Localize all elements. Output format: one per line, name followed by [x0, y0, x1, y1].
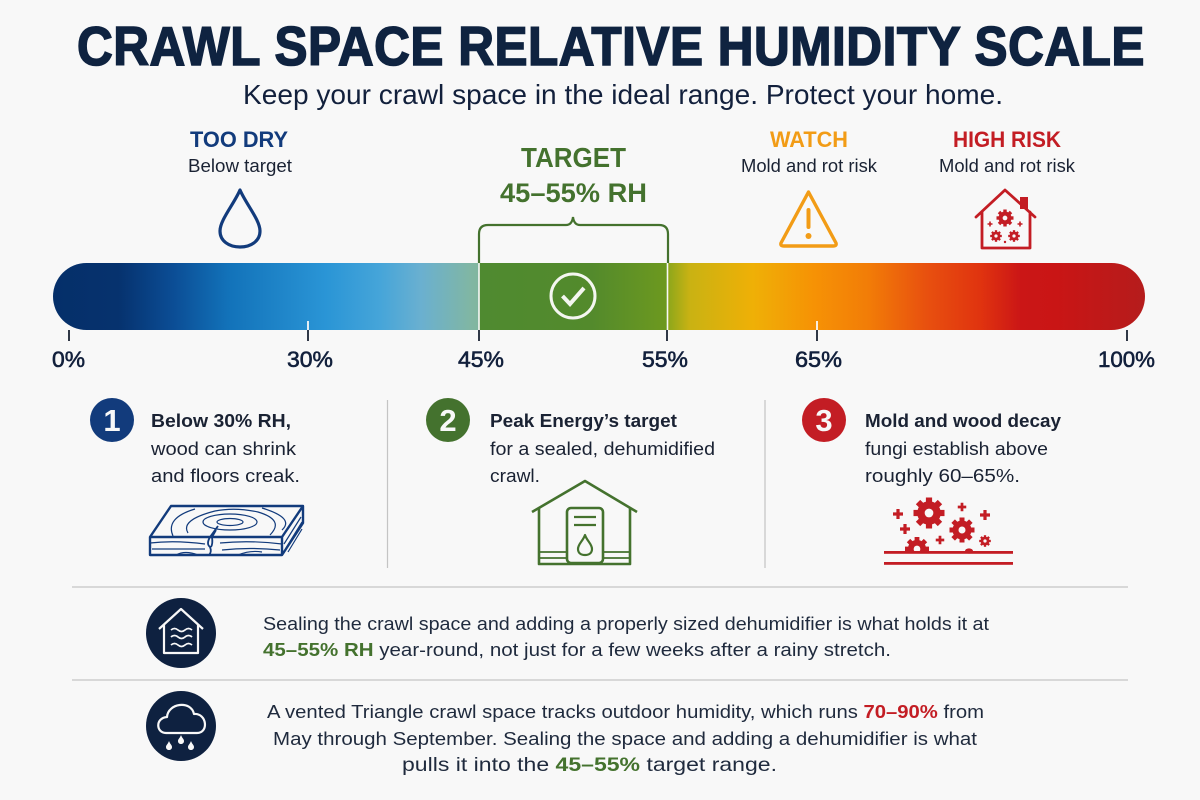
zone label: high risk: [939, 127, 1076, 176]
icon: house with humidity waves: [146, 598, 216, 668]
divider: [764, 400, 766, 568]
zone label: target: 45–55% RH: [500, 178, 647, 208]
note text 3: fungi establish above: [865, 438, 1048, 459]
panel: high risk note: [802, 398, 1062, 565]
note text 3: roughly 60–65%.: [865, 465, 1020, 486]
zone label: target: [500, 142, 647, 208]
note text 2: for a sealed, dehumidified: [490, 438, 715, 459]
number badge 2: [426, 398, 470, 442]
note text 1: wood can shrink: [150, 438, 297, 459]
zone label: watch: [741, 127, 878, 176]
target zone: [479, 263, 667, 330]
callout: vented crawl text: May through September. Sealing the space and adding a dehumidifier is what: [273, 728, 977, 749]
zone label: too dry: TOO DRY: [190, 127, 288, 152]
zone label: too dry: Below target: [188, 156, 292, 176]
icon: house with dehumidifier: [532, 481, 637, 564]
number badge 2: 2: [439, 403, 457, 438]
icon: cracked wood board: [150, 506, 303, 555]
humidity gradient bar: [53, 263, 1145, 330]
scale ticks: [69, 330, 1127, 341]
callout: sealing text: 45–55% RH year-round, not just for a few weeks after a rainy stretch.: [263, 639, 891, 660]
icon: mold spores on surface: [884, 498, 1013, 565]
panel: target note: [426, 398, 715, 564]
note text 1: Below 30% RH,: [151, 410, 291, 431]
note text 1: and floors creak.: [151, 465, 300, 486]
scale labels: 55%: [642, 347, 688, 372]
zone label: watch: WATCH: [770, 127, 848, 152]
panel: too dry note: [90, 398, 303, 555]
zone label: high risk: Mold and rot risk: [939, 156, 1076, 176]
zone label: too dry: [188, 127, 292, 176]
note text 3: [865, 410, 1062, 486]
callout: vented crawl text: [267, 701, 984, 776]
number badge 3: 3: [815, 403, 833, 438]
target bracket: [479, 217, 668, 263]
note text 2: [490, 410, 715, 486]
divider: [72, 679, 1128, 681]
scale labels: 65%: [795, 347, 842, 372]
title: CRAWL SPACE RELATIVE HUMIDITY SCALE: [77, 17, 1144, 78]
icon: rain cloud: [146, 691, 216, 761]
note text 1: [150, 410, 300, 486]
callout: sealing text: [263, 613, 989, 660]
number badge 1: [90, 398, 134, 442]
scale labels: 30%: [287, 347, 333, 372]
note text 3: Mold and wood decay: [865, 410, 1062, 431]
icon: moldy house: [976, 190, 1035, 248]
icon: check mark: [551, 274, 595, 318]
scale labels: 0%: [52, 347, 85, 372]
zone label: high risk: HIGH RISK: [953, 127, 1061, 152]
zone label: watch: Mold and rot risk: [741, 156, 878, 176]
subtitle: Keep your crawl space in the ideal range. Protect your home.: [243, 79, 1003, 110]
icon: water drop: [220, 190, 260, 247]
number badge 3: [802, 398, 846, 442]
icon: warning triangle: [781, 192, 836, 246]
callout: vented crawl text: A vented Triangle crawl space tracks outdoor humidity, which runs 70–90% from: [267, 701, 984, 722]
callout: sealing text: Sealing the crawl space and adding a properly sized dehumidifier is what holds it at: [263, 613, 989, 634]
zone label: target: TARGET: [521, 142, 626, 173]
divider: [72, 586, 1128, 588]
note text 2: Peak Energy’s target: [490, 410, 677, 431]
note text 2: crawl.: [490, 465, 540, 486]
scale labels: [52, 347, 1155, 372]
scale labels: 45%: [458, 347, 504, 372]
number badge 1: 1: [103, 403, 121, 438]
scale labels: 100%: [1098, 347, 1155, 372]
callout: vented crawl text: pulls it into the 45–55% target range.: [402, 754, 777, 776]
divider: [386, 400, 388, 568]
